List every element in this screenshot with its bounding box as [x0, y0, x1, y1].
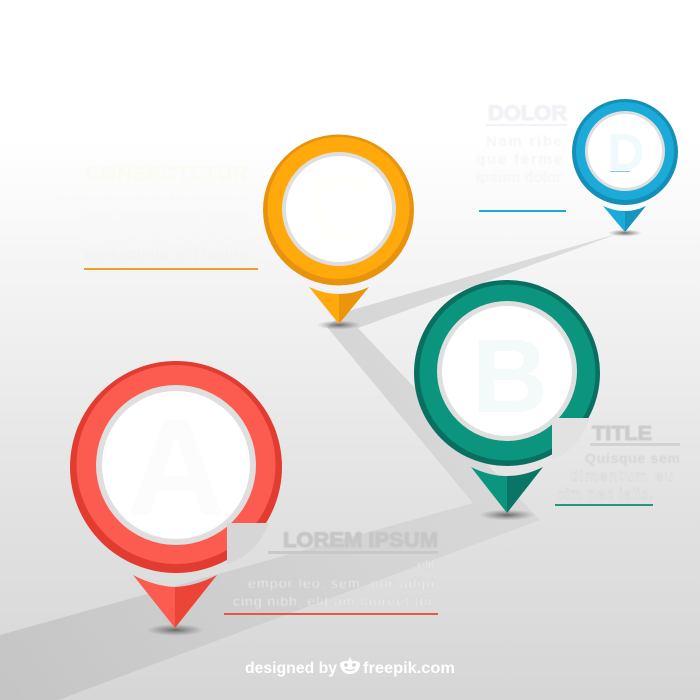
- callout dolor rule: [479, 210, 566, 212]
- pin C shadow: [317, 320, 361, 330]
- pin D ring: [572, 99, 678, 205]
- callout dolor heading: DOLOR: [488, 102, 567, 125]
- callout consectetur body: que fermentum ipsum: [85, 209, 250, 225]
- pin A ring: [70, 361, 282, 573]
- callout: lorem: [224, 523, 438, 615]
- callout dolor heading rule: [486, 124, 567, 126]
- callout dolor body: Nam ribe: [486, 133, 562, 150]
- callout lorem body: elit: [417, 556, 435, 572]
- freepik logo icon: [340, 657, 360, 674]
- credit text left: designed by: [245, 660, 337, 677]
- credit text right: freepik.com: [363, 660, 455, 677]
- callout dolor body: que ferme: [476, 151, 562, 168]
- callout consectetur body: ipsum dolor sit amet: [85, 227, 250, 243]
- pin C: orange: [263, 134, 414, 330]
- callout title rule: [555, 504, 653, 506]
- callout title heading rule: [590, 443, 680, 446]
- callout lorem heading rule: [268, 551, 438, 554]
- callout consectetur heading: CONSECTETUR: [85, 163, 249, 185]
- callout consectetur body: Nam ribe dum fermentum: [58, 191, 250, 207]
- pin C ring: [263, 134, 414, 286]
- callout dolor body: ipsum dolor: [476, 169, 562, 186]
- callout consectetur heading rule: [60, 185, 250, 187]
- road path: [0, 233, 620, 700]
- callout: consectetur: [58, 163, 258, 270]
- pin B ring: [414, 280, 600, 466]
- callout consectetur body: [58, 191, 255, 262]
- callout title body: dimentum eu: [570, 468, 673, 485]
- callout lorem rule: [224, 613, 438, 615]
- callout dolor body: [476, 133, 562, 186]
- callout consectetur body: consectetur elit iaculis.: [85, 246, 255, 262]
- callout title heading: TITLE: [592, 423, 652, 445]
- pin D letter: D: [607, 124, 645, 182]
- footer credit: [245, 657, 455, 677]
- callout title body: [557, 450, 680, 503]
- callout title cut-out: [552, 418, 590, 460]
- pin B pointer: [471, 467, 543, 513]
- pin C letter: C: [305, 155, 373, 261]
- pin B shadow: [479, 510, 535, 520]
- pin B letter: B: [472, 318, 548, 435]
- pin D underscore mark: [610, 171, 630, 172]
- callout: dolor: [476, 102, 567, 212]
- pin D shadow: [608, 230, 642, 236]
- pin A pointer: [133, 575, 217, 628]
- pin A shadow: [146, 624, 204, 636]
- callout: title: [552, 418, 680, 506]
- callout consectetur rule: [84, 268, 258, 270]
- callout title body: Quisque sem: [585, 450, 680, 466]
- callout lorem body: empor leo, sem, our adipi: [248, 575, 434, 591]
- pin D pointer: [603, 206, 646, 232]
- pin D: blue: [572, 99, 678, 236]
- pin A: red: [70, 361, 282, 636]
- pin B: green: [414, 280, 600, 520]
- callout title body: cim nec ialis.: [557, 486, 653, 503]
- pin C pointer: [309, 287, 369, 324]
- callout lorem heading: LOREM IPSUM: [283, 529, 438, 552]
- pin A letter: A: [126, 391, 226, 545]
- callout lorem body: [233, 556, 437, 609]
- callout lorem body: cing nibh, elit am laoreet tur.: [233, 593, 437, 609]
- callout lorem cut-out: [227, 523, 269, 564]
